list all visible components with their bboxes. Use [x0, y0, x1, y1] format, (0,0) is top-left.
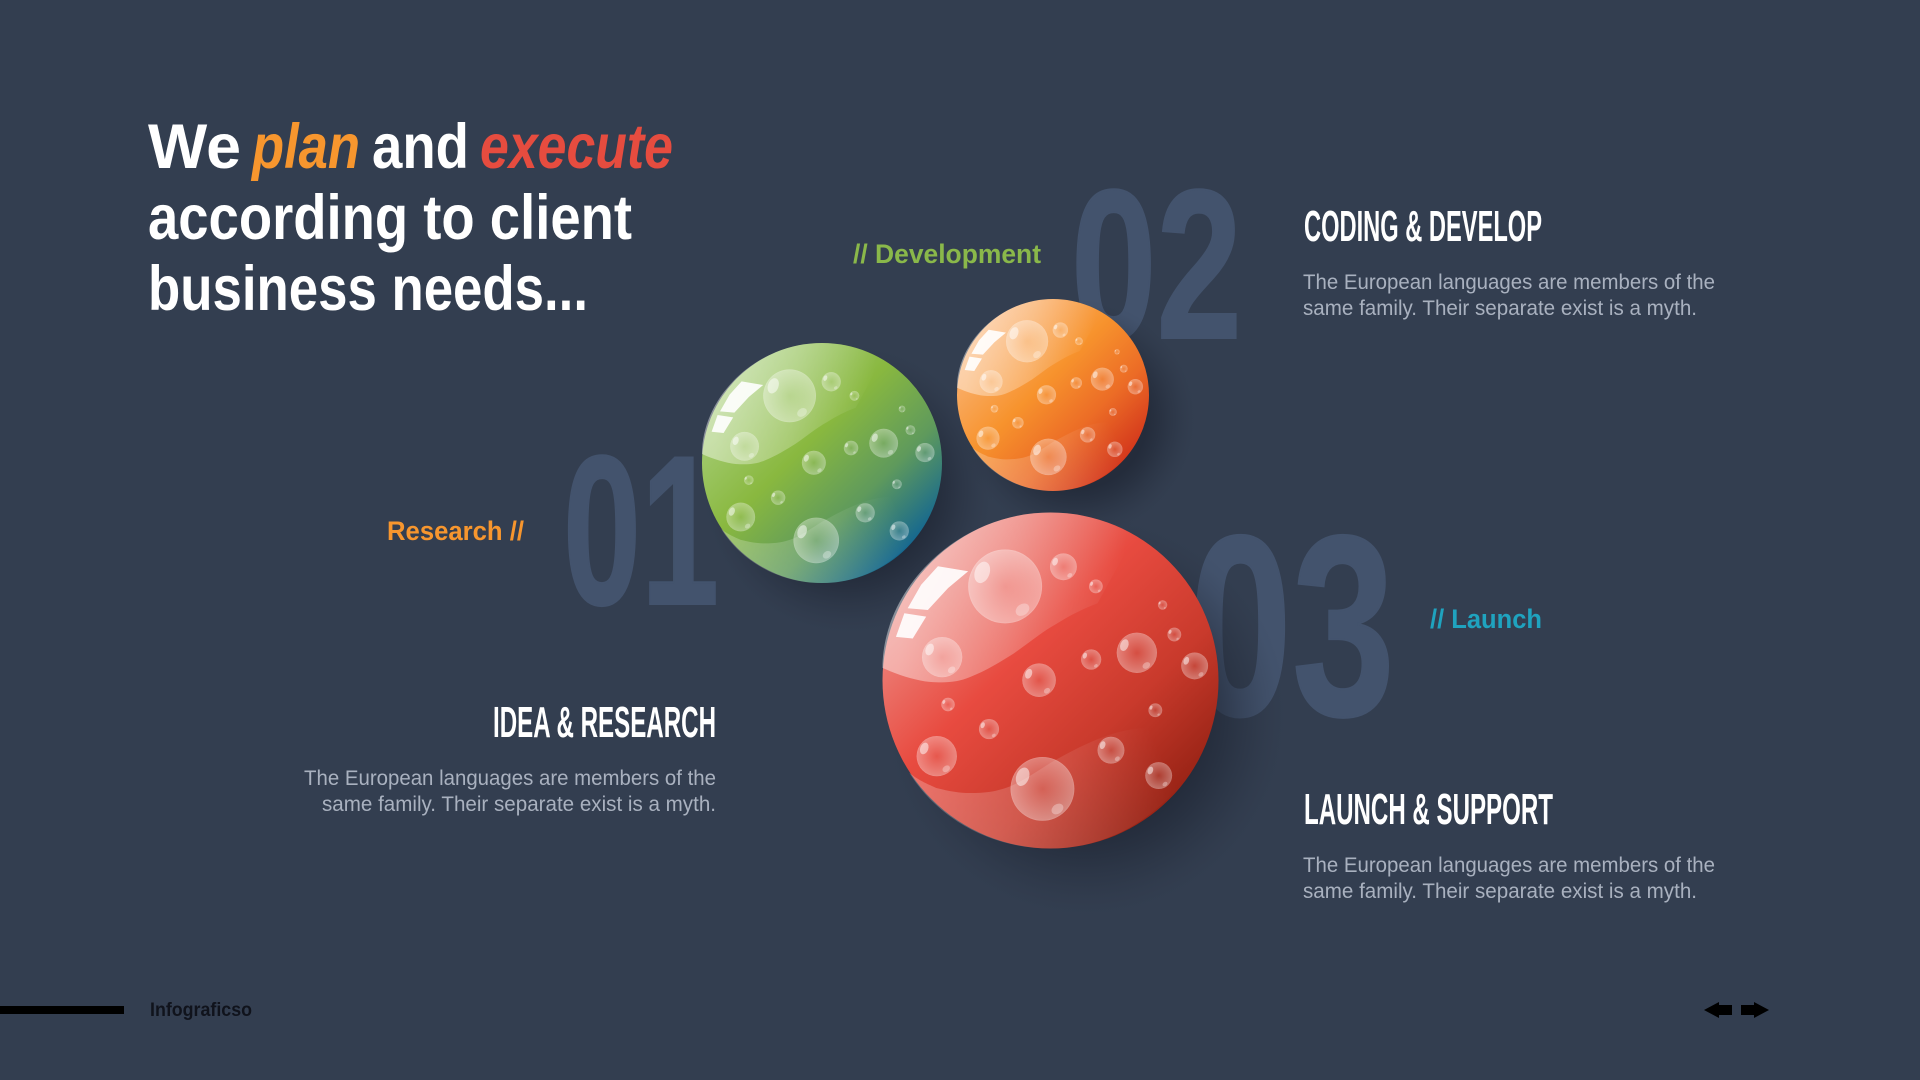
label: development: // Development: [853, 239, 1041, 269]
sphere: green: [702, 343, 942, 583]
title: execute: [480, 112, 673, 182]
footer bar: [0, 1006, 124, 1014]
footer brand: Infograficso: [150, 1000, 252, 1021]
label: launch: // Launch: [1430, 604, 1542, 634]
title: and: [372, 112, 469, 182]
label: research: Research //: [387, 516, 524, 546]
title: We: [148, 112, 241, 182]
text block: launch and support: [1303, 785, 1715, 903]
heading: IDEA & RESEARCH: [493, 698, 716, 747]
description: same family. Their separate exist is a myth.: [1303, 297, 1697, 320]
title: [148, 112, 673, 324]
heading: CODING & DEVELOP: [1304, 202, 1542, 251]
description: The European languages are members of the: [304, 767, 716, 790]
description: same family. Their separate exist is a myth.: [322, 793, 716, 816]
title: plan: [250, 112, 360, 182]
number 03: 03: [1189, 481, 1395, 770]
description: [304, 767, 716, 816]
description: The European languages are members of the: [1303, 271, 1715, 294]
number 02: 02: [1071, 146, 1242, 384]
heading: LAUNCH & SUPPORT: [1304, 785, 1553, 834]
icon: next arrow: [1741, 1002, 1769, 1018]
text block: idea and research: [304, 698, 716, 816]
description: [1303, 271, 1715, 320]
icon: previous arrow: [1704, 1002, 1732, 1018]
title: business needs...: [148, 254, 588, 324]
text block: coding and develop: [1303, 202, 1715, 320]
description: [1303, 854, 1715, 903]
title: according to client: [148, 183, 632, 253]
description: The European languages are members of the: [1303, 854, 1715, 877]
sphere: red: [882, 512, 1218, 848]
number 01: 01: [563, 412, 719, 650]
sphere shadows: [702, 299, 1288, 918]
description: same family. Their separate exist is a myth.: [1303, 880, 1697, 903]
sphere: orange: [957, 299, 1149, 491]
